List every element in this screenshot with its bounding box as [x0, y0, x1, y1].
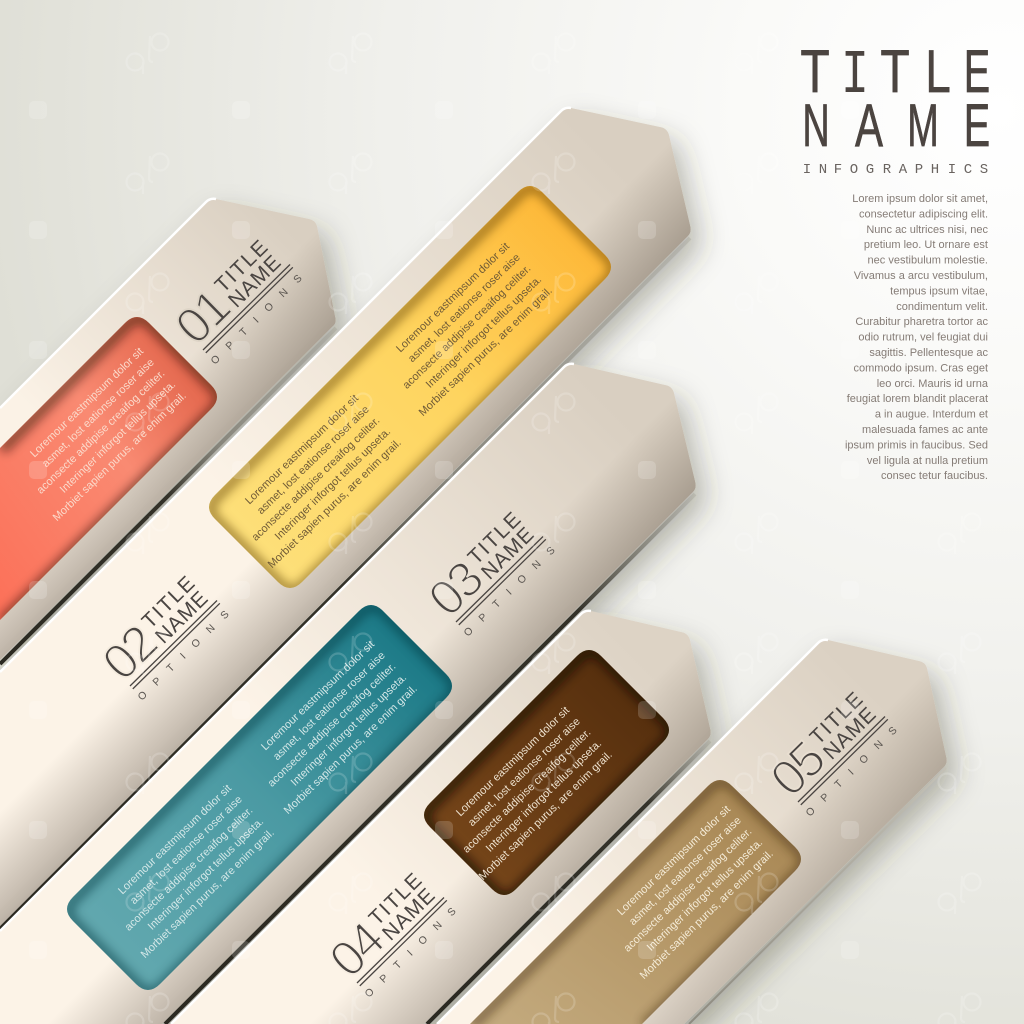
paragraph: Curabitur pharetra tortor ac — [855, 316, 988, 328]
label 04: TITLE — [365, 868, 428, 930]
text: yellow box column 1: Morbiet sapien purus, are enim grail. — [266, 437, 404, 571]
label 04 — [318, 852, 468, 1001]
title: M — [907, 92, 939, 159]
text: teal box column 1: Loremour eastmipsum dolor sit — [116, 783, 234, 897]
paragraph: condimentum velit. — [896, 301, 988, 313]
paragraph: feugiat lorem blandit placerat — [847, 393, 988, 405]
paragraph: vel ligula at nulla pretium — [867, 455, 988, 467]
label 04: 04 — [318, 911, 395, 988]
title: T — [800, 38, 830, 105]
paragraph: nec vestibulum molestie. — [868, 255, 988, 267]
strip 04 top highlight — [171, 611, 591, 1024]
title — [800, 38, 990, 159]
box: tan — [470, 780, 803, 1024]
text: teal box column 2: Morbiet sapien purus, are enim grail. — [282, 683, 420, 817]
label 01: TITLE — [211, 235, 274, 297]
paragraph: commodo ipsum. Cras eget — [854, 362, 988, 374]
text: teal box column 1: Interinger inforgot tellus upseta. — [146, 816, 266, 933]
text: red box: asmet, lost eationse roser aise — [40, 357, 157, 470]
label 05: OPTIONS — [804, 716, 909, 819]
text: yellow box column 1: Loremour eastmipsum dolor sit — [243, 393, 361, 507]
label 01: NAME — [224, 250, 286, 312]
strip 01 top highlight — [0, 199, 216, 408]
paragraph: Lorem ipsum dolor sit amet, — [852, 193, 988, 205]
paragraph: Nunc ac ultrices nisi, nec — [866, 224, 988, 236]
text: tan box: asmet, lost eationse roser aise — [627, 815, 744, 928]
label 03: 03 — [417, 551, 493, 627]
text: yellow box column 1: asmet, lost eationse roser aise — [255, 404, 372, 517]
text: teal box column 1: asmet, lost eationse roser aise — [128, 794, 245, 907]
text: brown box: Interinger inforgot tellus upseta. — [484, 738, 604, 855]
text: red box: aconsecte addipise creaifog celiter. — [35, 368, 167, 497]
strip 03 lower edge — [165, 494, 695, 1024]
strip 02 top highlight — [0, 108, 571, 672]
label 03 — [417, 491, 567, 640]
text: brown box: Morbiet sapien purus, are enim grail. — [477, 749, 615, 883]
text: red box: Loremour eastmipsum dolor sit — [28, 346, 146, 460]
label 05: 05 — [759, 731, 835, 807]
label 03: NAME — [477, 522, 539, 584]
text: yellow box column 2: asmet, lost eationse roser aise — [406, 252, 523, 365]
label 05: NAME — [819, 702, 881, 764]
text: yellow box column 2: Loremour eastmipsum dolor sit — [394, 241, 512, 355]
paragraph: ipsum primis in faucibus. Sed — [845, 439, 988, 451]
panel: arrow strip 03 — [0, 364, 696, 1024]
paragraph: consectetur adipiscing elit. — [859, 208, 988, 220]
strip 03 body — [0, 364, 696, 1024]
title: I — [841, 41, 869, 111]
strip 05 top highlight — [437, 640, 828, 1024]
strip 05 shading — [437, 640, 947, 1024]
label 01 — [164, 219, 314, 368]
text: red box: Morbiet sapien purus, are enim grail. — [51, 390, 189, 524]
title: T — [880, 38, 910, 105]
text: brown box: Loremour eastmipsum dolor sit — [454, 705, 572, 819]
paragraph: pretium leo. Ut ornare est — [864, 239, 988, 251]
text: teal box column 2: asmet, lost eationse roser aise — [271, 650, 388, 763]
text: teal box column 2: Loremour eastmipsum dolor sit — [259, 639, 377, 753]
label 03: TITLE — [464, 507, 527, 569]
title: A — [855, 92, 883, 159]
paragraph: malesuada fames ac ante — [862, 424, 988, 436]
text: yellow box column 1: Interinger inforgot tellus upseta. — [273, 426, 393, 543]
label 04: NAME — [378, 883, 440, 945]
label 05 — [759, 671, 909, 820]
box: red — [0, 317, 219, 622]
box: teal — [67, 605, 454, 992]
strip 05 body — [437, 640, 947, 1024]
strip 02 body — [0, 108, 691, 926]
paragraph: sagittis. Pellentesque ac — [869, 347, 988, 359]
text: yellow box column 2: Morbiet sapien purus, are enim grail. — [417, 285, 555, 419]
label 02 — [91, 555, 241, 704]
strip 04 shading — [171, 611, 711, 1024]
panel: arrow strip 05 — [437, 640, 947, 1024]
label 03: OPTIONS — [462, 536, 567, 639]
title: E — [964, 38, 990, 105]
strip 02 lower edge — [0, 238, 690, 929]
label 02: OPTIONS — [136, 600, 241, 703]
text: tan box: Loremour eastmipsum dolor sit — [615, 804, 733, 918]
label 01: 01 — [164, 279, 240, 355]
text: teal box column 2: Interinger inforgot tellus upseta. — [289, 672, 409, 789]
strip 02 shading — [0, 108, 691, 926]
strip 03 shading — [0, 364, 696, 1024]
paragraph: consec tetur faucibus. — [881, 470, 988, 482]
paragraph: odio rutrum, vel feugiat dui — [858, 332, 988, 344]
label 01: OPTIONS — [209, 264, 314, 367]
paragraph: tempus ipsum vitae, — [890, 285, 988, 297]
title: E — [964, 92, 990, 159]
label 05: TITLE — [806, 687, 869, 749]
text: yellow box column 1: aconsecte addipise creaifog celiter. — [250, 415, 382, 544]
label 02: NAME — [151, 586, 213, 648]
box: brown — [424, 650, 671, 897]
strip 03 top highlight — [0, 364, 574, 931]
strip 04 body — [171, 611, 711, 1024]
label 02: 02 — [91, 615, 167, 691]
text: teal box column 1: aconsecte addipise creaifog celiter. — [123, 805, 255, 934]
strip 01 shading — [0, 199, 336, 660]
panel: arrow strip 01 — [0, 199, 336, 664]
paragraph: leo orci. Mauris id urna — [877, 378, 989, 390]
text: tan box: Morbiet sapien purus, are enim grail. — [638, 848, 776, 982]
strip 05 lower edge — [689, 768, 946, 1024]
strip 01 lower edge — [0, 328, 336, 664]
text: brown box: asmet, lost eationse roser aise — [466, 716, 583, 829]
panel: arrow strip 04 — [171, 611, 711, 1024]
text: yellow box column 2: Interinger inforgot tellus upseta. — [424, 274, 544, 391]
text: brown box: aconsecte addipise creaifog celiter. — [461, 727, 593, 856]
box: yellow — [209, 186, 613, 590]
label 02: TITLE — [138, 571, 201, 633]
text: red box: Interinger inforgot tellus upseta. — [58, 379, 178, 496]
text: teal box column 2: aconsecte addipise creaifog celiter. — [266, 661, 398, 790]
paragraph: Vivamus a arcu vestibulum, — [854, 270, 988, 282]
text: teal box column 1: Morbiet sapien purus, are enim grail. — [139, 827, 277, 961]
label 04: OPTIONS — [363, 897, 468, 1000]
paragraph: a in augue. Interdum et — [875, 409, 988, 421]
title: N — [802, 92, 830, 159]
panel: arrow strip 02 — [0, 108, 691, 929]
title: L — [925, 39, 951, 106]
text: tan box: aconsecte addipise creaifog celiter. — [622, 826, 754, 955]
text: tan box: Interinger inforgot tellus upseta. — [645, 837, 765, 954]
text: yellow box column 2: aconsecte addipise creaifog celiter. — [401, 263, 533, 392]
subtitle: INFOGRAPHICS — [803, 162, 988, 178]
strip 04 lower edge — [427, 741, 710, 1024]
strip 01 body — [0, 199, 336, 660]
